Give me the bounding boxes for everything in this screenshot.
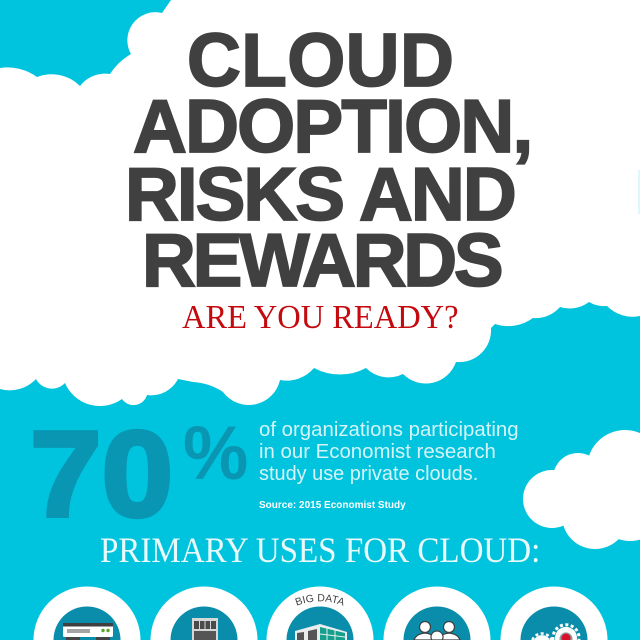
use circle: big data [266, 586, 374, 640]
section heading: PRIMARY USES FOR CLOUD: [100, 531, 540, 570]
statistic description: of organizations participating [259, 419, 519, 441]
statistic: 70%: 70 [30, 405, 173, 542]
icon: gears [532, 625, 579, 640]
blue sky corner above the cloud [0, 0, 171, 86]
statistic: 70%: % [183, 410, 248, 495]
title: RISKS AND [125, 152, 515, 236]
large white cloud background [0, 0, 640, 406]
title: ADOPTION, [133, 84, 531, 168]
icon: storage rack [192, 618, 218, 640]
label: BIG DATA: BIG DATA [295, 594, 344, 606]
source note: Source: 2015 Economist Study [259, 500, 406, 511]
icon: data center building [295, 624, 347, 640]
use circle: gears [500, 586, 608, 640]
title: CLOUD [187, 18, 454, 102]
use circle: team of people [384, 586, 490, 640]
small white cloud [523, 430, 640, 549]
icon: people [414, 622, 460, 640]
use circle: server [34, 586, 140, 640]
statistic: 70% [30, 405, 248, 542]
statistic description: in our Economist research [259, 441, 496, 463]
statistic description: study use private clouds. [259, 463, 478, 485]
statistic description [259, 419, 519, 485]
title: REWARDS [142, 218, 501, 302]
title [125, 18, 531, 302]
icon: server unit [63, 623, 113, 640]
use circle: storage rack [150, 586, 258, 640]
subtitle: ARE YOU READY? [182, 298, 458, 336]
faint sliver at right edge [638, 170, 640, 214]
